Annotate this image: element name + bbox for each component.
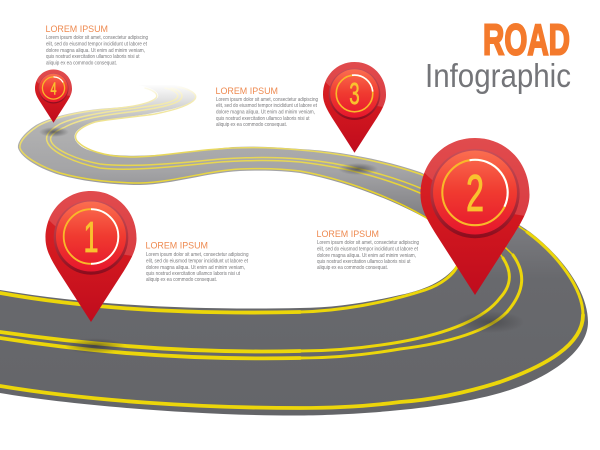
text block: beside pin 2: elit, sed do eiusmod tempor incididunt ut labore et	[317, 246, 418, 252]
text block: top left: elit, sed do eiusmod tempor incididunt ut labore et	[46, 42, 147, 48]
pin 1: 1	[83, 212, 99, 262]
text block: top centre: dolore magna aliqua. Ut enim ad minim veniam,	[216, 110, 315, 116]
text block: beside pin 1: elit, sed do eiusmod tempor incididunt ut labore et	[146, 258, 248, 264]
pin 2	[420, 138, 530, 295]
text block: top left: quis nostrud exercitation ullamco laboris nisi ut	[46, 54, 140, 60]
text block: top left: dolore magna aliqua. Ut enim ad minim veniam,	[46, 48, 145, 54]
text block: beside pin 2: dolore magna aliqua. Ut enim ad minim veniam,	[317, 253, 416, 259]
text block: top left	[46, 24, 148, 66]
pin 4: 4	[50, 80, 57, 99]
text block: top centre: quis nostrud exercitation ullamco laboris nisi ut	[216, 116, 310, 122]
pin shadows on road	[39, 127, 524, 354]
text block: top centre: elit, sed do eiusmod tempor incididunt ut labore et	[216, 103, 317, 109]
text block: beside pin 1: Lorem ipsum dolor sit amet, consectetur adipiscing	[146, 252, 249, 258]
pin 3	[323, 62, 386, 153]
text block: beside pin 2: Lorem ipsum dolor sit amet, consectetur adipiscing	[317, 240, 419, 246]
text block: beside pin 1: quis nostrud exercitation ullamco laboris nisi ut	[146, 271, 240, 277]
text block: beside pin 2: LOREM IPSUM	[316, 229, 379, 240]
pin 2: 2	[466, 165, 484, 223]
text block: beside pin 2	[316, 229, 419, 271]
text block: beside pin 1: dolore magna aliqua. Ut enim ad minim veniam,	[146, 265, 245, 271]
title	[425, 16, 571, 94]
pin 4	[35, 70, 72, 123]
text block: top centre	[216, 86, 318, 128]
text block: beside pin 2: quis nostrud exercitation ullamco laboris nisi ut	[317, 259, 411, 265]
title: Infographic: Infographic	[425, 57, 571, 94]
pin 3: 3	[349, 78, 360, 111]
text block: top centre: Lorem ipsum dolor sit amet, consectetur adipiscing	[216, 97, 318, 103]
text block: top left: aliquip ex ea commodo consequat.	[46, 60, 117, 66]
text block: top centre: LOREM IPSUM	[216, 86, 278, 97]
text block: beside pin 2: aliquip ex ea commodo consequat.	[317, 265, 388, 271]
text block: beside pin 1: aliquip ex ea commodo consequat.	[146, 277, 217, 283]
text block: top left: Lorem ipsum dolor sit amet, consectetur adipiscing	[46, 35, 148, 41]
text block: beside pin 1: LOREM IPSUM	[146, 240, 208, 252]
text block: top centre: aliquip ex ea commodo consequat.	[216, 122, 287, 128]
road markings	[0, 87, 583, 408]
road	[0, 85, 588, 416]
pin 1	[46, 191, 136, 322]
road surface	[0, 85, 588, 416]
text block: beside pin 1	[146, 240, 249, 283]
text block: top left: LOREM IPSUM	[46, 24, 108, 35]
